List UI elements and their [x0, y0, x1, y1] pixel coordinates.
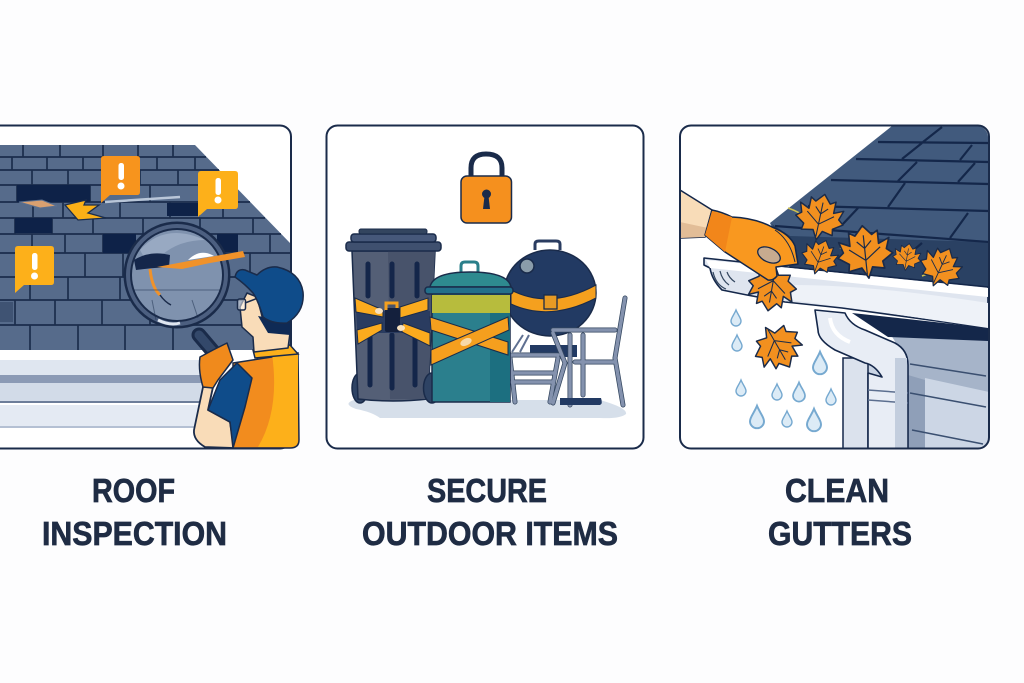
bin straps [356, 311, 430, 333]
grill [504, 241, 596, 357]
maple leaves [748, 194, 963, 370]
glove holding handle [199, 343, 233, 388]
green bin [425, 262, 513, 402]
holes [15, 185, 238, 253]
trash bin [346, 229, 441, 403]
caption: clean gutters [768, 472, 912, 552]
caption: clean gutters: CLEAN [785, 472, 889, 509]
ground shadow [348, 400, 626, 418]
gutter [704, 258, 988, 328]
caption: roof inspection: INSPECTION [42, 515, 227, 552]
caption: secure outdoor items: OUTDOOR ITEMS [362, 515, 618, 552]
falling water drops [731, 310, 836, 431]
alert bubbles [15, 156, 238, 293]
roof shingles [0, 145, 290, 350]
torn shingle pieces [19, 200, 57, 208]
caption: secure outdoor items [362, 472, 618, 552]
icon: padlock [461, 154, 512, 223]
green bin strap knot [459, 336, 473, 348]
panel: clean gutters [680, 126, 989, 449]
magnifying glass [124, 222, 245, 355]
panel border [680, 126, 989, 448]
gutter fascia [0, 360, 202, 428]
caption: roof inspection [42, 472, 227, 552]
caption: roof inspection: ROOF [92, 472, 175, 509]
worker [194, 267, 303, 448]
green bin straps [430, 317, 508, 355]
roof shingles [770, 126, 989, 290]
downspout [815, 310, 908, 449]
panel: roof inspection [0, 126, 303, 448]
gloved hand [680, 190, 798, 280]
chairs and table [508, 298, 625, 405]
caption: clean gutters: GUTTERS [768, 515, 912, 552]
caption: secure outdoor items: SECURE [427, 472, 547, 509]
panel border [0, 126, 291, 448]
wall and siding [843, 313, 989, 449]
panel: secure outdoor items [326, 126, 644, 448]
